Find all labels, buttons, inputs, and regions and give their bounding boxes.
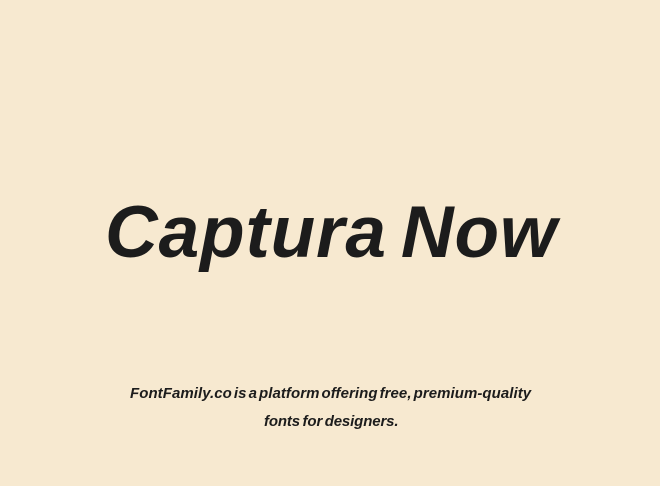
caption line 1: FontFamily.co is a platform offering free, premium-quality [130, 385, 531, 402]
caption text [130, 385, 532, 430]
title: Captura Now [105, 192, 558, 273]
caption line 2: fonts for designers. [264, 413, 398, 430]
